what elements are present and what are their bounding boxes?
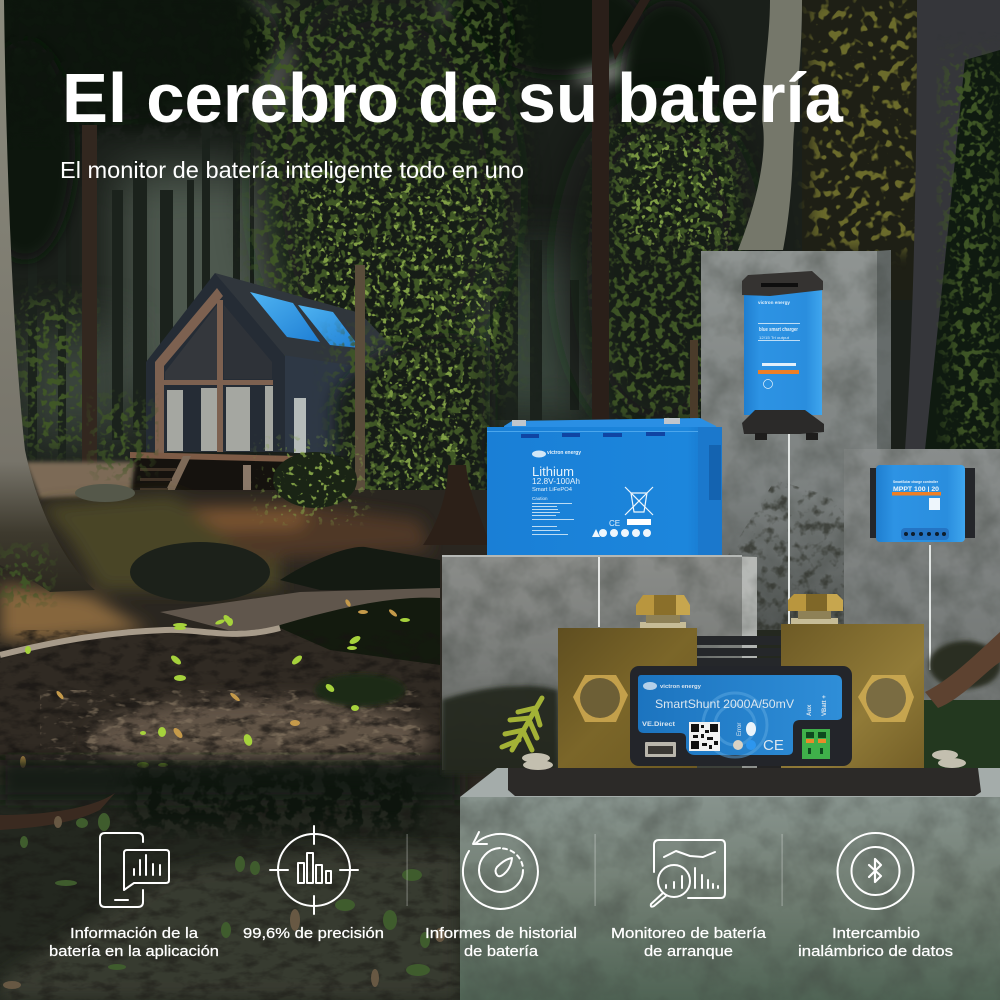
shunt housing	[630, 666, 852, 766]
label	[425, 925, 577, 960]
battery label: Caution	[532, 496, 548, 501]
tree and bushes in front of cabin	[335, 265, 490, 520]
right concrete block	[844, 449, 1000, 768]
MPPT label: SmartSolar charge controller	[893, 480, 938, 484]
gap behind shunt	[757, 630, 787, 670]
bushes	[0, 400, 360, 600]
feature: precision	[243, 826, 384, 942]
shunt text: VE.Direct	[642, 721, 676, 728]
label	[798, 925, 953, 960]
charger label: victron energy	[758, 300, 791, 305]
charger label: 12/15 Tri output	[759, 335, 790, 340]
lower concrete plinth	[460, 768, 1000, 1000]
label	[49, 925, 219, 960]
battery label: victron energy	[547, 450, 582, 456]
shunt text: VBatt +	[822, 695, 828, 716]
label: batería en la aplicación	[49, 943, 219, 960]
canopy shadows	[0, 0, 720, 260]
leaning pale trunk	[738, 0, 802, 250]
cabin side wall	[285, 352, 417, 460]
battery label: 12.8V-100Ah	[532, 477, 580, 486]
base screws	[522, 750, 966, 770]
battery label: Lithium	[532, 464, 574, 479]
moss and leaf litter	[0, 495, 430, 640]
bright foliage highlights	[300, 0, 920, 370]
headline: El cerebro de su batería	[62, 59, 844, 137]
label: de arranque	[644, 943, 733, 960]
MPPT solar charge controller	[870, 465, 975, 542]
VE.Direct port	[645, 742, 676, 757]
safety icons	[592, 529, 651, 537]
near trunks	[82, 0, 698, 492]
brass block left	[558, 628, 697, 768]
charger label: blue smart charger	[759, 327, 799, 333]
label: 99,6% de precisión	[243, 925, 384, 942]
distant tree trunks	[28, 80, 579, 460]
boulders	[75, 484, 270, 602]
shrub, log and fern by block	[924, 632, 1000, 768]
lithium battery	[487, 418, 722, 555]
shunt text: Aux	[807, 704, 813, 716]
left big tree trunk	[0, 0, 95, 592]
feature: starter battery monitoring	[611, 840, 767, 960]
tall concrete pillar	[701, 250, 891, 651]
subtitle: El monitor de batería inteligente todo en uno	[60, 157, 524, 183]
QR code	[689, 722, 720, 751]
shunt text	[642, 682, 828, 754]
fern	[502, 698, 542, 750]
mossy hump	[270, 598, 440, 665]
shunt text: CE	[763, 737, 784, 754]
foreground plants	[3, 813, 445, 989]
dark undergrowth	[0, 760, 460, 1000]
icon: target with bars	[270, 826, 358, 914]
battery label: CE	[609, 519, 620, 528]
side bolts	[573, 675, 914, 722]
bright seedlings	[25, 613, 410, 803]
label: de batería	[464, 943, 539, 960]
ground and forest floor	[0, 0, 500, 1000]
misty background light	[20, 0, 635, 440]
shunt centre bars	[697, 636, 783, 666]
feature: app info	[49, 833, 219, 960]
blue smart charger	[742, 271, 824, 440]
label: inalámbrico de datos	[798, 943, 953, 960]
charger label	[758, 300, 800, 366]
label: Informes de historial	[425, 925, 577, 942]
shunt text: Error	[737, 723, 743, 736]
deck and stairs	[130, 452, 340, 500]
feature: wireless data exchange	[798, 833, 953, 960]
mid-green foliage	[0, 0, 917, 450]
solar panels	[250, 292, 360, 348]
divider	[406, 834, 408, 906]
grey path	[160, 588, 440, 632]
shunt text: victron energy	[660, 684, 702, 690]
shunt text: SmartShunt 2000A/50mV	[655, 697, 794, 711]
green terminal block	[802, 729, 830, 759]
label: Información de la	[70, 925, 199, 942]
curtains	[167, 386, 306, 453]
middle concrete block	[442, 555, 757, 775]
pine on the right	[925, 50, 1000, 450]
label: Intercambio	[832, 925, 920, 942]
shunt label screen	[638, 675, 842, 755]
top nuts	[636, 594, 843, 628]
dark hump	[280, 547, 440, 590]
right grey trunk	[905, 0, 1000, 450]
cabin gable front	[146, 273, 285, 452]
label	[611, 925, 767, 960]
earth slope	[0, 628, 440, 800]
timber frame	[155, 288, 273, 454]
feature: history reports	[425, 832, 577, 960]
sunlit clearing	[25, 462, 135, 498]
icon: bluetooth rings	[838, 833, 914, 909]
divider	[782, 834, 783, 906]
cabin roof	[215, 273, 405, 373]
battery label	[532, 450, 651, 535]
fallen leaves	[20, 599, 398, 790]
battery label: Smart LiFePO4	[532, 487, 572, 493]
icon: gauge with return arrow	[463, 832, 538, 909]
divider	[594, 834, 596, 906]
shunt base	[508, 768, 981, 796]
status LEDs	[733, 722, 756, 750]
brass block right	[781, 624, 924, 768]
icon: phone with chart bubble	[100, 833, 169, 907]
icon: dashboard with magnifier	[651, 840, 725, 907]
tree stump	[423, 465, 490, 545]
SmartShunt 2000A/50mV	[508, 594, 981, 796]
recycling symbol	[625, 487, 653, 515]
pale rim of root	[0, 628, 280, 655]
cabin with solar panels	[130, 273, 417, 500]
MPPT label	[893, 480, 940, 510]
MPPT label: MPPT 100 | 20	[893, 486, 939, 493]
label: Monitoreo de batería	[611, 925, 767, 942]
forest background	[0, 0, 1000, 560]
